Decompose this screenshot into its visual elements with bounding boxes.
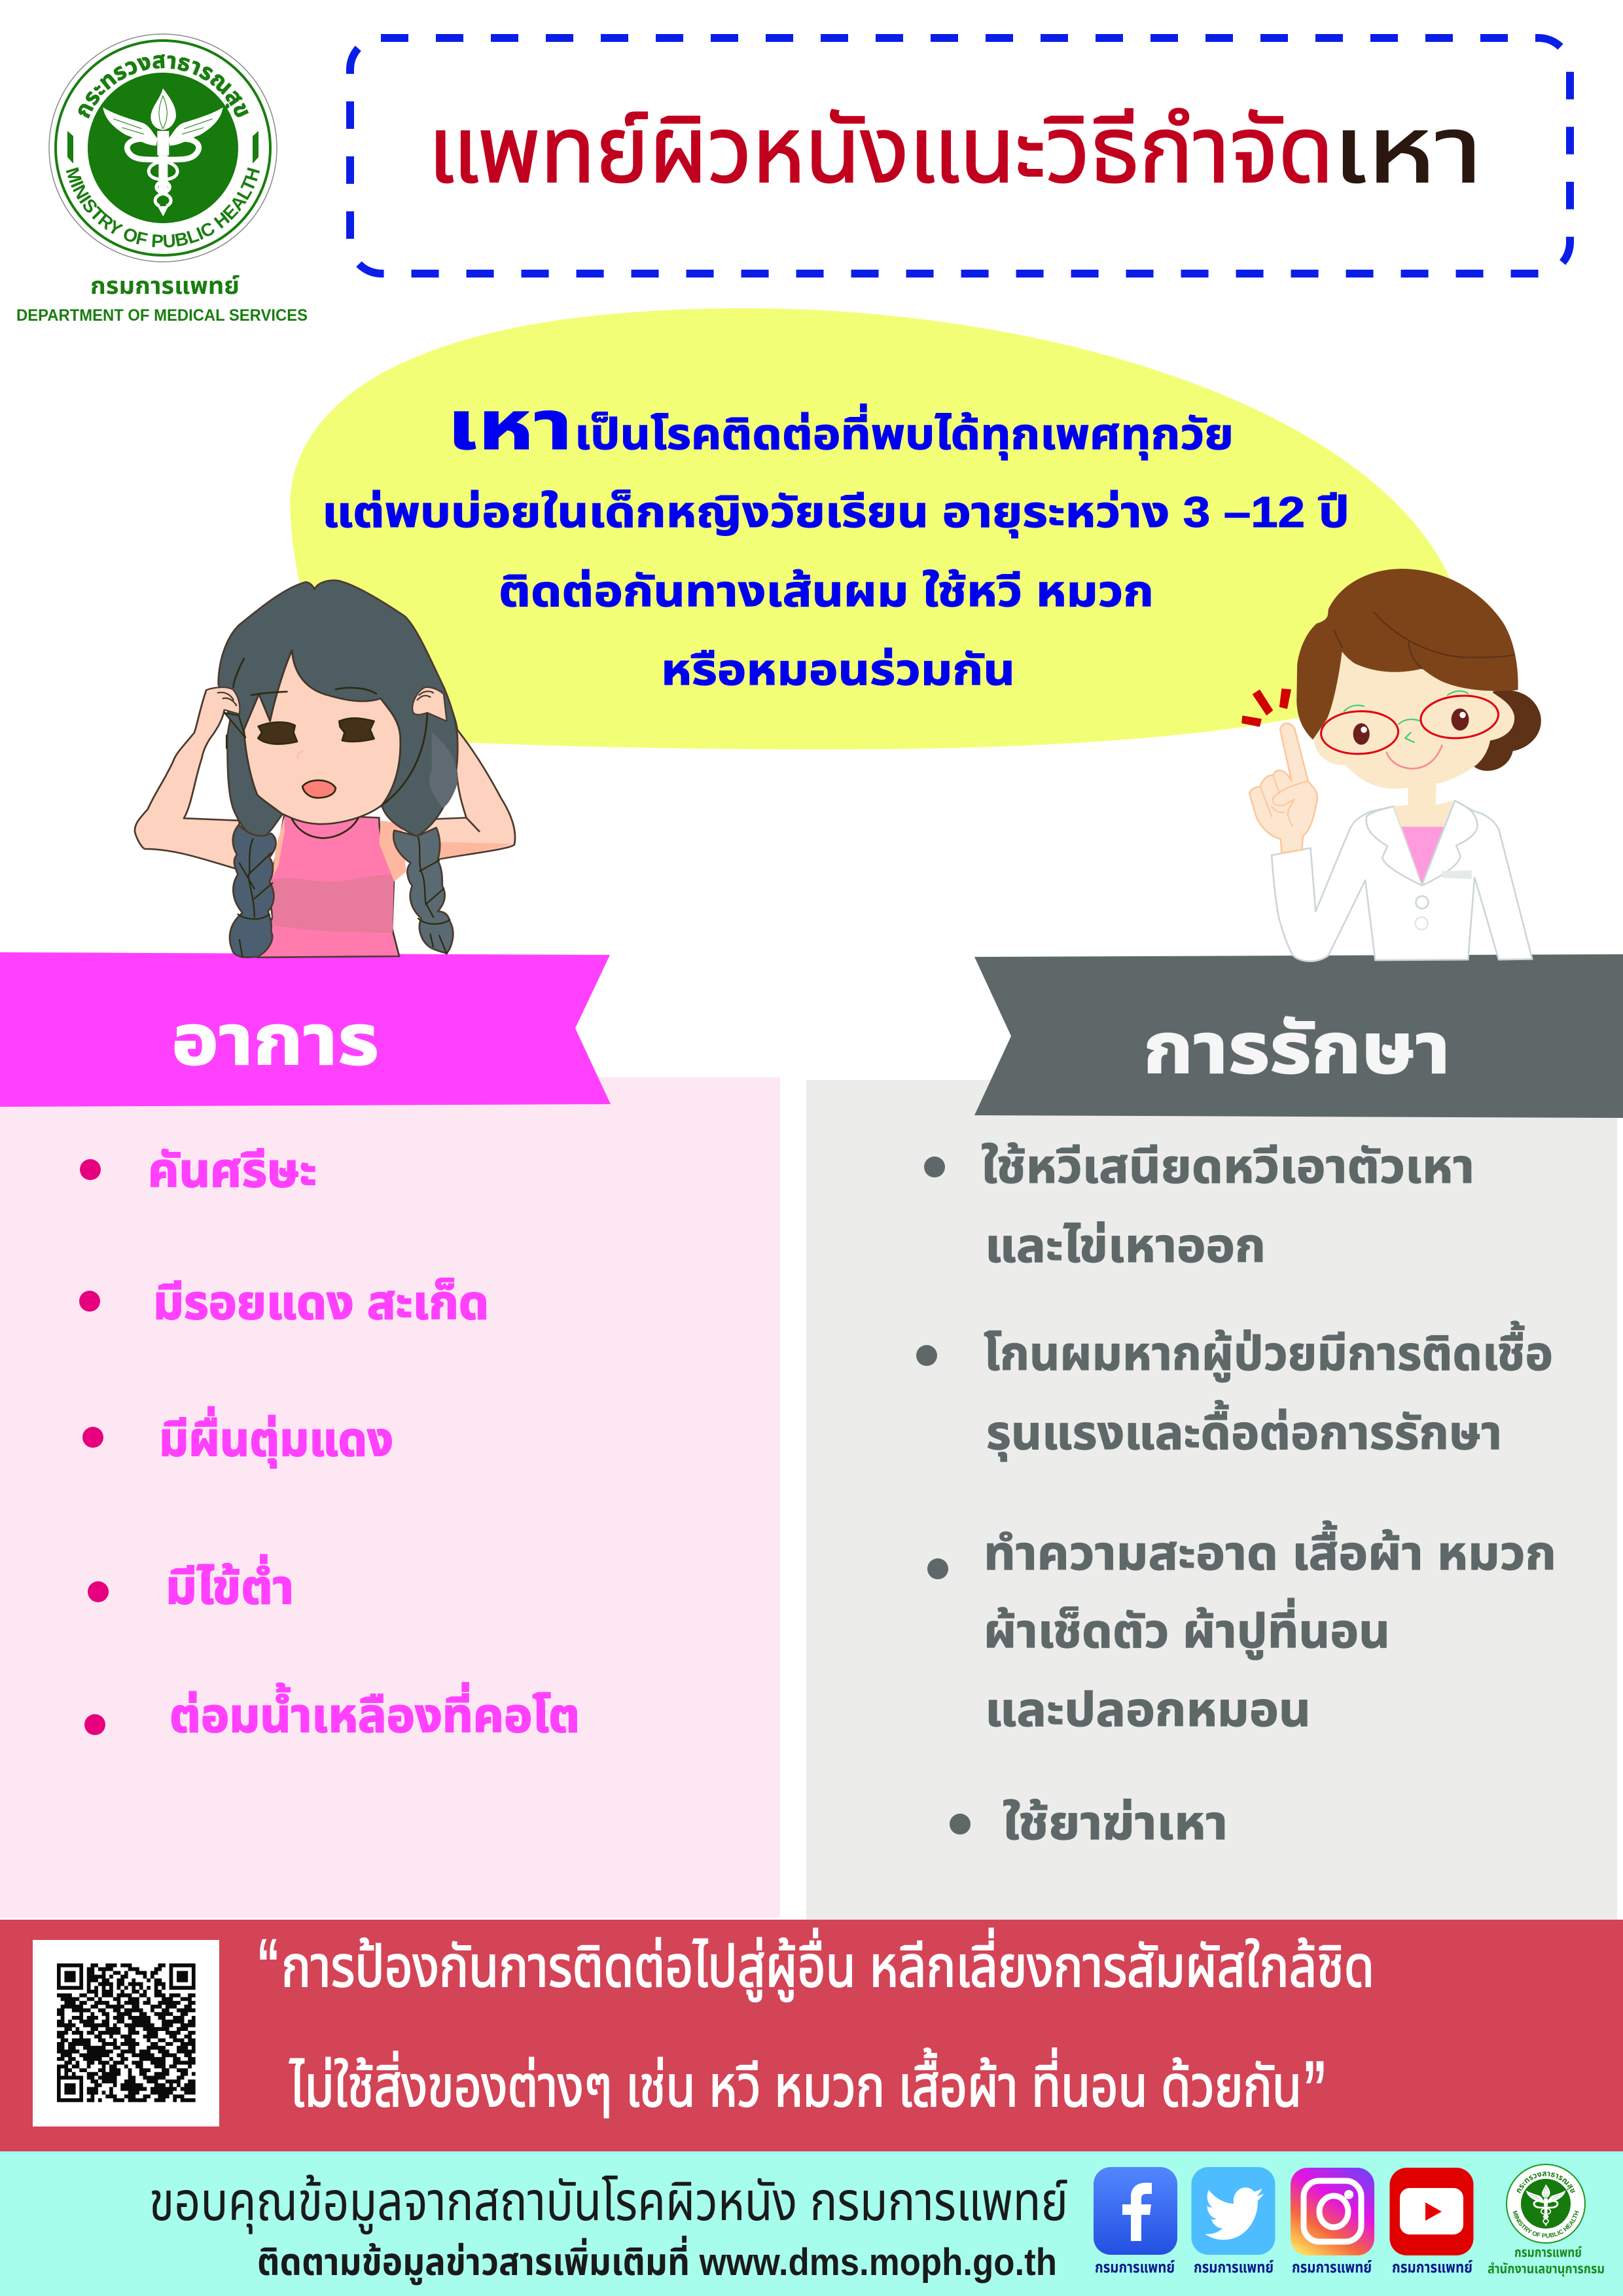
prevention quote: การป้องกันการติดต่อไปสู่ผู้อื่น หลีกเลี่ยงการสัมผัสใกล้ชิด: [281, 1928, 1374, 2001]
social labels: [1095, 2259, 1472, 2276]
bubble text: เหา: [447, 388, 573, 464]
icon: youtube: [1390, 2168, 1474, 2255]
band: prevention: [0, 1920, 1623, 2151]
title box dashed border: [350, 38, 1570, 274]
icon: twitter: [1191, 2167, 1275, 2255]
social labels: กรมการแพทย์: [1194, 2259, 1274, 2276]
small ministry logo: สำนักงานเลขานุการกรม: [1488, 2262, 1605, 2276]
social labels: กรมการแพทย์: [1392, 2259, 1472, 2276]
QR code card: [33, 1940, 219, 2126]
logo: Ministry of Public Health seal: MINISTRY OF PUBLIC HEALTH: [65, 168, 260, 247]
list: treatment: โกนผมหากผู้ป่วยมีการติดเชื้อ: [984, 1321, 1553, 1382]
small ministry logo: กรมการแพทย์: [1514, 2246, 1582, 2260]
logo: Ministry of Public Health seal: [48, 33, 277, 262]
ribbon: treatment: [974, 954, 1623, 1118]
prevention quote: ไม่ใช้สิ่งของต่างๆ เช่น หวี หมวก เสื้อผ้า ที่นอน ด้วยกัน: [289, 2048, 1302, 2119]
list: treatment: ใช้ยาฆ่าเหา: [1003, 1797, 1228, 1850]
small ministry logo: [1488, 2164, 1605, 2276]
prevention quote: ”: [1302, 2045, 1327, 2132]
title: แพทย์ผิวหนังแนะวิธีกำจัด: [428, 98, 1334, 202]
icon: instagram: [1291, 2168, 1374, 2255]
logo caption: department name: DEPARTMENT OF MEDICAL SERVICES: [16, 306, 308, 325]
footer band: [0, 2151, 1623, 2296]
bubble text: แต่พบบ่อยในเด็กหญิงวัยเรียน อายุระหว่าง 3 –12 ปี: [322, 488, 1349, 538]
list: treatment: และปลอกหมอน: [985, 1684, 1311, 1736]
footer credit text: [149, 2172, 1068, 2286]
list: treatment: ผ้าเช็ดตัว ผ้าปูที่นอน: [984, 1598, 1390, 1660]
panel: symptoms background: [0, 1077, 780, 1918]
list: symptoms: คันศรีษะ: [148, 1145, 317, 1197]
logo caption: department name: [16, 272, 308, 325]
list: treatment: รุนแรงและดื้อต่อการรักษา: [986, 1400, 1502, 1462]
prevention quote: “: [257, 1924, 280, 2005]
bubble text: [322, 388, 1349, 694]
list: treatment: ใช้หวีเสนียดหวีเอาตัวเหา: [981, 1141, 1474, 1193]
bubble text: หรือหมอนร่วมกัน: [661, 645, 1015, 694]
icon: facebook: [1094, 2167, 1177, 2255]
bubble text: เป็นโรคติดต่อที่พบได้ทุกเพศทุกวัย: [575, 404, 1234, 460]
small ministry logo: กระทรวงสาธารณสุข: [1517, 2172, 1575, 2193]
prevention quote: [257, 1924, 1374, 2132]
list: symptoms: [79, 1145, 580, 1742]
logo caption: department name: กรมการแพทย์: [90, 272, 240, 299]
ribbon: symptoms: อาการ: [171, 1000, 379, 1079]
list: treatment: [916, 1141, 1556, 1850]
illustration: girl scratching head: [135, 581, 515, 958]
panel: treatment background: [806, 1080, 1617, 1920]
list: treatment: และไข่เหาออก: [985, 1220, 1266, 1272]
title: เหา: [1332, 98, 1483, 202]
social labels: กรมการแพทย์: [1095, 2259, 1175, 2276]
list: treatment: ทำความสะอาด เสื้อผ้า หมวก: [984, 1520, 1556, 1580]
bubble text: ติดต่อกันทางเส้นผม ใช้หวี หมวก: [499, 567, 1154, 615]
list: symptoms: มีผื่นตุ่มแดง: [159, 1407, 393, 1468]
list: symptoms: มีรอยแดง สะเก็ด: [153, 1277, 489, 1329]
footer credit text: ติดตามข้อมูลข่าวสารเพิ่มเติมที่ www.dms.moph.go.th: [257, 2235, 1057, 2286]
list: symptoms: ต่อมน้ำเหลืองที่คอโต: [169, 1683, 580, 1742]
list: symptoms: มีไข้ต่ำ: [166, 1554, 294, 1614]
ribbon: symptoms: [0, 952, 611, 1107]
ribbon: treatment: การรักษา: [1143, 1009, 1450, 1088]
footer credit text: ขอบคุณข้อมูลจากสถาบันโรคผิวหนัง กรมการแพทย์: [149, 2172, 1068, 2234]
illustration: doctor pointing: [1241, 569, 1541, 961]
small ministry logo: MINISTRY OF PUBLIC HEALTH: [1513, 2211, 1578, 2238]
speech bubble: [290, 308, 1452, 749]
logo: Ministry of Public Health seal: กระทรวงสาธารณสุข: [79, 54, 249, 119]
social labels: กรมการแพทย์: [1292, 2259, 1372, 2276]
